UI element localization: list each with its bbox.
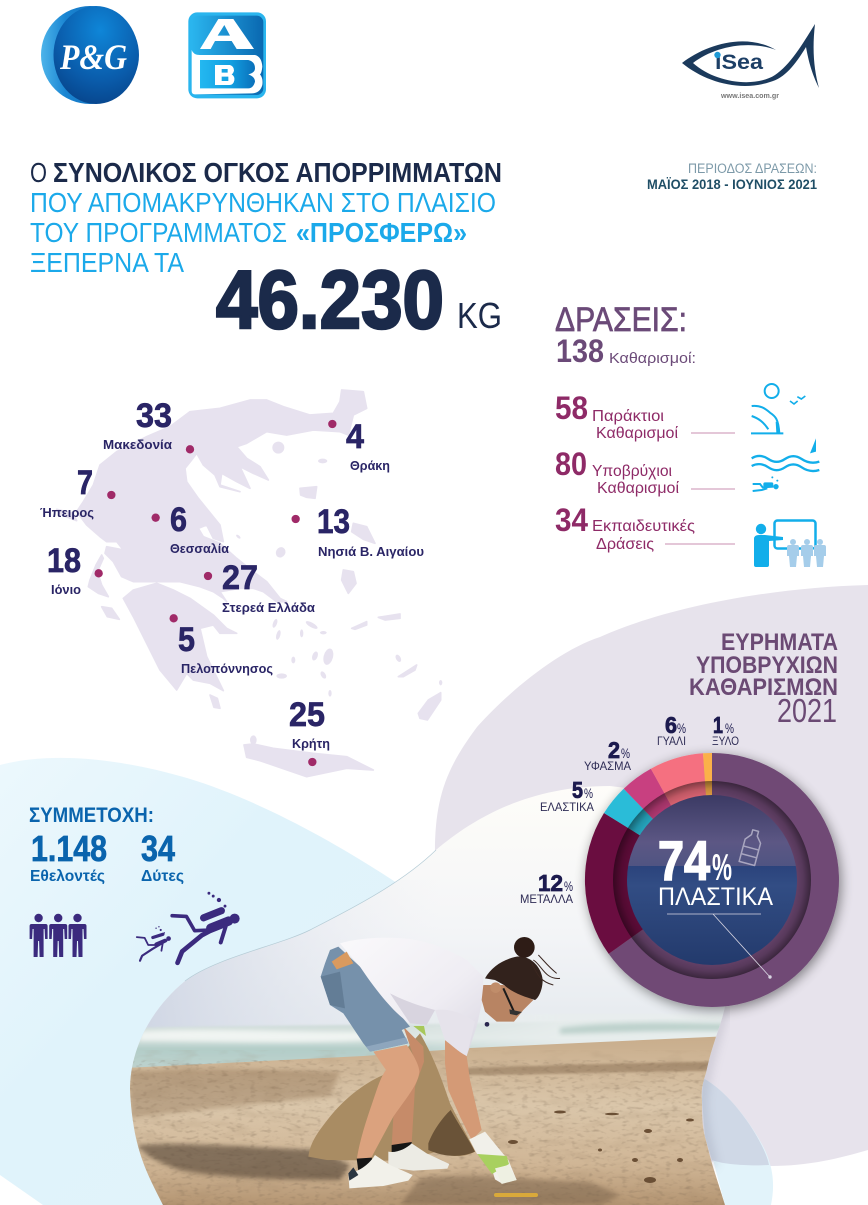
title text: ΣΥΝΟΛΙΚΟΣ ΟΓΚΟΣ ΑΠΟΡΡΙΜΜΑΤΩΝ: [53, 157, 502, 188]
map of Greece: [57, 390, 442, 777]
stat: volunteers: [30, 828, 107, 885]
logo: iSea: iSea: [715, 51, 763, 74]
heading: underwater cleanup findings 2021: ΚΑΘΑΡΙΣΜΩΝ: [689, 674, 838, 701]
donut inner shaded ring: [613, 781, 811, 979]
region: Macedonia: 33: [136, 397, 172, 435]
region: Epirus: [40, 464, 94, 520]
region: Epirus: Ήπειρος: [40, 505, 94, 520]
stat: educational actions: Εκπαιδευτικές: [592, 518, 695, 535]
sack: [308, 1033, 475, 1161]
heading: actions: ΔΡΑΣΕΙΣ:: [555, 301, 687, 339]
stat: coastal cleanups: Παράκτιοι: [592, 408, 664, 425]
period of actions: ΠΕΡΙΟΔΟΣ ΔΡΑΣΕΩΝ:: [688, 161, 817, 176]
shorts: [321, 947, 410, 1052]
total amount: KG: [457, 295, 502, 336]
chart label: metals 12%: %: [564, 878, 573, 894]
region: Crete: [289, 696, 330, 751]
logo: iSea: www.isea.com.gr: [720, 91, 779, 100]
chart label: fabric 2%: 2: [608, 737, 620, 763]
chart label: elastics 5%: [540, 777, 594, 814]
chart label: elastics 5%: ΕΛΑΣΤΙΚΑ: [540, 802, 594, 814]
region: Thessaly: Θεσσαλία: [170, 541, 229, 556]
glove: [469, 1132, 517, 1183]
chart label: glass 6%: [657, 712, 686, 748]
background shape: blue wave overlap lower right: [702, 1007, 773, 1205]
region: Central Greece: Στερεά Ελλάδα: [222, 600, 315, 615]
chart label: glass 6%: ΓΥΑΛΙ: [657, 736, 686, 748]
panel: participation: [29, 804, 240, 963]
back leg: [392, 1027, 424, 1147]
chart label: wood 1%: 1: [713, 712, 723, 738]
stat: 138 cleanups: [556, 333, 696, 369]
stat: underwater cleanups: Καθαρισμοί: [597, 480, 680, 497]
region: Crete: 25: [289, 696, 325, 734]
shoes: [388, 1143, 449, 1171]
stat: coastal cleanups: Καθαρισμοί: [596, 425, 679, 442]
stat: educational actions: Δράσεις: [596, 536, 654, 553]
title text: ΤΟΥ ΠΡΟΓΡΑΜΜΑΤΟΣ: [30, 217, 287, 248]
region: North Aegean islands: 13: [317, 503, 350, 541]
chart label: elastics 5%: %: [584, 785, 593, 801]
map point markers: [94, 420, 336, 766]
region: Macedonia: Μακεδονία: [103, 437, 172, 452]
donut centre: sea image: [627, 795, 797, 965]
map labels: regions and counts: [40, 397, 424, 751]
chart label: metals 12%: ΜΕΤΑΛΛΑ: [520, 894, 573, 906]
region: Ionian: Ιόνιο: [51, 582, 81, 597]
title text: «ΠΡΟΣΦΕΡΩ»: [296, 217, 467, 248]
donut centre label: 74% plastics: %: [712, 847, 732, 888]
logo: iSea: [682, 24, 819, 100]
pointer line to plastics segment: [667, 914, 771, 978]
region: Thrace: [346, 418, 390, 473]
donut chart: findings by material: [585, 753, 839, 1007]
stat: divers: [141, 828, 184, 885]
title text: Ο: [30, 157, 47, 188]
chart label: metals 12%: 12: [538, 870, 563, 896]
icon: plastic bottle: [739, 829, 763, 866]
title text: ΠΟΥ ΑΠΟΜΑΚΡΥΝΘΗΚΑΝ ΣΤΟ ΠΛΑΙΣΙΟ: [30, 187, 496, 218]
icon: three volunteers: [30, 914, 86, 957]
region: Thrace: Θράκη: [350, 458, 390, 473]
logo: P&G: P&G: [59, 37, 127, 77]
glasses: [503, 988, 514, 1012]
donut centre label: 74% plastics: [658, 829, 773, 911]
stat: 138 cleanups: 138: [556, 333, 604, 369]
logo: P&G: [41, 6, 139, 104]
period of actions: [647, 161, 817, 192]
chart label: wood 1%: %: [725, 720, 734, 736]
chart label: metals 12%: [520, 870, 573, 906]
title text: ΞΕΠΕΡΝΑ ΤΑ: [30, 247, 185, 278]
region: Thrace: 4: [346, 418, 364, 456]
icon: two divers: [137, 892, 240, 963]
stat: divers: 34: [141, 828, 175, 869]
chart label: fabric 2%: %: [621, 745, 630, 761]
photo: volunteer collecting litter on the beach: [125, 780, 735, 1205]
region: Ionian: [47, 542, 81, 597]
stat: underwater cleanups: Υποβρύχιοι: [592, 463, 672, 480]
donut centre label: 74% plastics: ΠΛΑΣΤΙΚΑ: [658, 883, 773, 911]
icon: coast with sun and birds: [751, 384, 805, 433]
stat: volunteers: 1.148: [31, 828, 107, 869]
chart label: wood 1%: ΞΥΛΟ: [712, 736, 739, 748]
background shape: lavender blob: [435, 585, 868, 1166]
region: Central Greece: [222, 559, 315, 615]
chart label: fabric 2%: [584, 737, 631, 773]
panel: actions: [555, 301, 826, 567]
donut segments: [585, 753, 839, 1007]
logo: AB: [188, 12, 266, 98]
t-shirt: [340, 938, 483, 1056]
arm: [445, 1040, 482, 1140]
heading: underwater cleanup findings 2021: ΥΠΟΒΡΥΧΙΩΝ: [696, 652, 838, 679]
stat: educational actions: [555, 502, 735, 553]
stat: coastal cleanups: [555, 390, 735, 442]
region: Crete: Κρήτη: [292, 736, 330, 751]
face: [482, 985, 533, 1022]
region: Macedonia: [103, 397, 172, 452]
donut centre label: 74% plastics: 74: [658, 829, 710, 892]
heading: underwater cleanup findings 2021: ΕΥΡΗΜΑΤΑ: [721, 629, 838, 656]
region: Peloponnese: Πελοπόννησος: [181, 661, 273, 676]
period of actions: ΜΑΪΟΣ 2018 - ΙΟΥΝΙΟΣ 2021: [647, 177, 817, 192]
region: Thessaly: 6: [170, 501, 187, 539]
hair: [485, 957, 543, 1000]
icon: teacher with students: [754, 520, 826, 567]
background shape: light blue wave: [0, 758, 400, 1205]
heading: participation: ΣΥΜΜΕΤΟΧΗ:: [29, 804, 154, 827]
front leg: [357, 1045, 419, 1160]
region: Peloponnese: [178, 621, 273, 676]
title text: [30, 157, 502, 278]
thin edge of photo shape: [185, 850, 436, 981]
chart label: glass 6%: 6: [665, 712, 677, 738]
region: North Aegean islands: [317, 503, 424, 559]
chart label: elastics 5%: 5: [572, 777, 583, 803]
socks: [356, 1158, 372, 1170]
stat: underwater cleanups: [555, 446, 735, 497]
region: Central Greece: 27: [222, 559, 258, 597]
stat: divers: Δύτες: [141, 868, 184, 885]
chart label: glass 6%: %: [677, 720, 686, 736]
chart label: wood 1%: [712, 712, 739, 748]
stat: educational actions: 34: [555, 502, 588, 538]
icon: waves, sail and diver: [752, 438, 819, 491]
total amount: 46.230: [216, 253, 444, 346]
stat: coastal cleanups: 58: [555, 390, 588, 426]
stat: volunteers: Εθελοντές: [30, 868, 105, 885]
region: Epirus: 7: [77, 464, 93, 502]
stat: underwater cleanups: 80: [555, 446, 587, 482]
heading: underwater cleanup findings 2021: 2021: [777, 692, 837, 729]
chart label: fabric 2%: ΥΦΑΣΜΑ: [584, 761, 631, 773]
region: North Aegean islands: Νησιά Β. Αιγαίου: [318, 544, 424, 559]
region: Thessaly: [170, 501, 229, 556]
region: Peloponnese: 5: [178, 621, 195, 659]
heading: underwater cleanup findings 2021: [689, 629, 838, 729]
region: Ionian: 18: [47, 542, 81, 580]
stat: 138 cleanups: Καθαρισμοί:: [609, 350, 696, 367]
